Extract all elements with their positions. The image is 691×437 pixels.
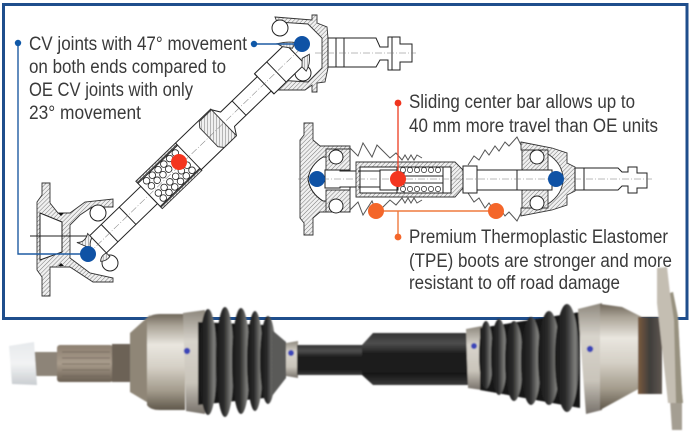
upper right CV housing and stem — [272, 15, 416, 92]
text: sliding center bar callout: Sliding center bar allows up to — [409, 92, 635, 113]
text: TPE boots callout: resistant to off road damage — [409, 273, 620, 294]
text: TPE boots callout — [409, 227, 672, 294]
center line — [298, 178, 652, 180]
lower left CV housing — [30, 183, 118, 296]
threaded end and nut — [9, 342, 132, 385]
text: CV joints callout: CV joints with 47° movement — [29, 34, 248, 55]
right boot — [468, 137, 521, 221]
text: CV joints callout — [29, 34, 248, 124]
photo: CV axle assembly — [9, 267, 683, 430]
left CV joint — [300, 123, 358, 235]
right silver housing — [578, 303, 642, 414]
text: CV joints callout: OE CV joints with only — [29, 80, 193, 101]
right boot — [466, 304, 580, 412]
black center shaft — [297, 333, 470, 385]
sliding center housing — [356, 162, 463, 197]
callout: CV joint leader lines — [15, 36, 564, 262]
left boot — [350, 143, 422, 215]
text: CV joints callout: 23° movement — [29, 103, 142, 124]
callout: boot markers — [368, 203, 504, 240]
rotated shaft with sliding section — [74, 31, 318, 268]
weld and flange — [638, 267, 683, 430]
text: sliding center bar callout: 40 mm more travel than OE units — [409, 116, 658, 137]
diagram: straight axle cutaway — [298, 123, 652, 235]
diagram: angled axle cutaway — [30, 15, 416, 296]
callout: sliding bar markers — [171, 100, 406, 187]
text: CV joints callout: on both ends compared to — [29, 57, 226, 78]
text: sliding center bar callout — [409, 92, 658, 137]
left boot — [198, 307, 298, 417]
left silver housing — [130, 310, 205, 414]
panel: frame around technical drawings — [4, 4, 687, 318]
right shaft and CV joint — [463, 142, 647, 216]
